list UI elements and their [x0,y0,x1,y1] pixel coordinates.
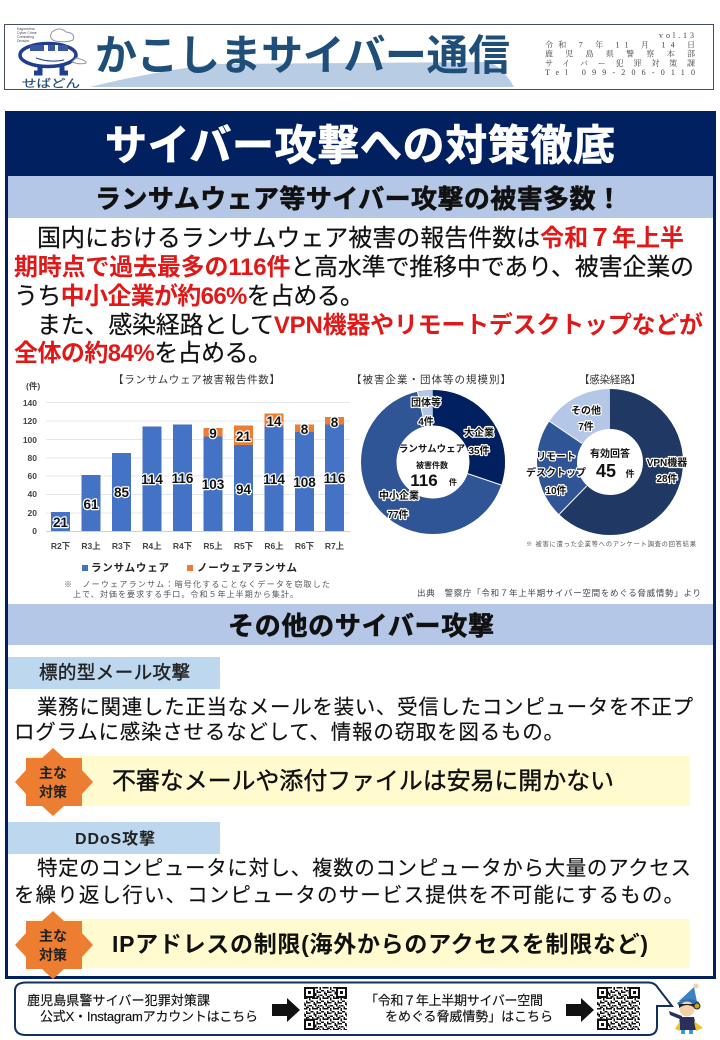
bar chart: ransomware reports [23,373,350,599]
donut labels [379,396,494,521]
donut labels: 35件 [468,444,490,457]
header wave [90,62,514,87]
icon: mascot logo: Cyber Crime [17,31,37,35]
icon: orange star badge: 主な [39,765,67,781]
footer callout [15,982,672,1035]
survey note: ※ 被害に遭った企業等へのアンケート調査の回答結果 [526,539,697,548]
issue details: サイバー犯罪対策課 [545,58,695,68]
icon: orange star badge [15,748,93,816]
x-axis labels: R2下 [51,541,71,551]
subheading: ransomware damage [8,176,713,218]
bar chart: ransomware reports: 60 [28,471,37,481]
donut centre: ランサムウェア [399,444,466,455]
issue details: 鹿児島県警察本部 [545,48,695,58]
chart title: 【感染経路】 [579,373,641,386]
text block: targeted email description: ログラムに感染させるなどして、情報の窃取を図るもの。 [14,721,564,744]
label: DDoS attack: DDoS攻撃 [75,830,155,848]
bar value labels: 61 [83,497,99,512]
bar value labels: 21 [53,515,68,530]
bar value labels: 85 [114,485,129,500]
title band: サイバー攻撃への対策徹底 [105,122,615,169]
x-axis labels [51,541,345,551]
arrow [272,998,300,1022]
bars: ransomware [51,424,344,531]
subheading: ransomware damage: ランサムウェア等サイバー攻撃の被害多数！ [95,184,622,214]
icon: orange star badge: 主な [39,928,67,944]
x-axis labels: R3下 [112,541,132,551]
chart title: 【被害企業・団体等の規模別】 [351,373,511,386]
bar value labels: 114 [141,472,163,487]
donut centre: 件 [625,468,635,479]
label: targeted email attack [8,657,220,689]
intro text block: 期時点で過去最多の116件と高水準で推移中であり、被害企業の [14,254,694,281]
icon: orange star badge [15,911,93,979]
text block: DDoS description: 特定のコンピュータに対し、複数のコンピュータから大量のアクセス [37,857,691,880]
donut labels: 7件 [578,420,594,433]
donut centre: 45 [596,461,616,481]
bar value labels: 116 [324,471,346,486]
bar chart: ransomware reports: 0 [32,526,37,536]
subheading: other attacks [8,604,713,645]
QR code: social accounts [304,987,347,1030]
QR code: threat report [597,987,640,1030]
x-axis labels: R5下 [234,541,254,551]
donut labels: 団体等 [411,396,441,409]
issue details: vol.13 [659,31,694,40]
donut labels [526,404,687,497]
chart title: 【ランサムウェア被害報告件数】 [113,373,280,386]
bar value labels: 14 [266,414,282,429]
countermeasure: email [15,748,690,816]
bar value labels [53,414,346,530]
bar value labels: 21 [236,429,251,444]
icon: mascot logo: Division [17,39,29,43]
footer text: social accounts: 鹿児島県警サイバー犯罪対策課 [27,993,210,1008]
donut labels: 28件 [656,472,678,485]
text block: targeted email description [14,696,694,744]
donut labels: 大企業 [464,426,494,439]
x-axis labels: R3上 [81,541,101,551]
icon: mascot logo [17,27,86,90]
donut centre: 116 [410,471,438,490]
x-axis labels: R7上 [325,541,345,551]
bar chart: ransomware reports: 100 [23,435,37,445]
icon: orange star badge: 対策 [39,784,67,800]
text block: targeted email description: 業務に関連した正当なメールを装い、受信したコンピュータを不正プ [37,696,694,719]
bar value labels: 8 [301,422,309,437]
label: targeted email attack: 標的型メール攻撃 [39,662,190,683]
icon: mascot logo: Kagoshima [17,27,35,31]
bar value labels: 114 [263,472,285,487]
source note: 出典 警察庁「令和７年上半期サイバー空間をめぐる脅威情勢」より [417,588,701,598]
bar value labels: 8 [331,415,339,430]
intro text block: また、感染経路としてVPN機器やリモートデスクトップなどが [37,311,703,339]
intro text block: 国内におけるランサムウェア被害の報告件数は令和７年上半 [37,225,684,252]
donut labels: 77件 [387,508,409,521]
footer callout: 公式X・Instagramアカウントはこちら [40,1009,258,1024]
bar value labels: 108 [293,475,316,490]
text block: DDoS description [14,857,691,907]
countermeasure: email: 不審なメールや添付ファイルは安易に開かない [112,768,614,795]
x-axis labels: R6上 [264,541,284,551]
chart footnote: ※ ノーウェアランサム：暗号化することなくデータを窃取した [64,579,330,589]
bar value labels: 103 [202,477,225,492]
bar chart: ransomware reports: (件) [26,381,40,391]
donut labels: その他 [571,404,601,417]
donut labels: 中小企業 [379,489,419,502]
bar chart: ransomware reports: 上で、対価を要求する手口。令和５年上半期から集計。 [73,589,298,599]
newsletter title: かこしまサイバー通信 [95,32,510,79]
donut labels: 10件 [545,484,567,497]
donut centre: 件 [449,477,457,487]
legend: ランサムウェア [91,562,170,574]
donut labels: VPN機器 [647,456,687,469]
donut chart: company size [351,373,511,521]
x-axis labels: R6下 [295,541,315,551]
icon: mascot logo: Combating [17,35,34,39]
intro text block: うち中小企業が約66%を占める。 [14,282,364,310]
x-axis labels: R4下 [173,541,193,551]
bar chart: ransomware reports: 20 [28,508,37,518]
bar chart: ransomware reports: 140 [23,398,37,408]
bar chart: ransomware reports: 80 [28,453,37,463]
issue details: 令和 7 年 11 月 14 日 [545,40,695,50]
arrow [566,998,594,1022]
header banner [4,24,714,90]
issue details: Tel 099-206-0110 [545,68,695,77]
icon: orange star badge: 対策 [39,947,67,963]
legend [82,562,297,574]
countermeasure: DDoS [15,911,690,979]
icon: mascot logo: せばどん [22,77,80,90]
donut chart: infection route [526,373,697,548]
footer text: threat report: 「令和７年上半期サイバー空間 [365,993,543,1008]
issue details [545,31,695,77]
footer callout: をめぐる脅威情勢」はこちら [385,1009,553,1024]
donut centre: 有効回答 [590,447,630,460]
label: DDoS attack [8,822,220,854]
bar chart: ransomware reports: 40 [28,489,37,499]
bar value labels: 116 [172,471,194,486]
bar value labels: 9 [209,426,217,441]
donut centre: 被害件数 [416,460,448,470]
donut labels: デスクトップ [526,466,586,479]
intro text block: 全体の約84%を占める。 [14,340,272,367]
title band [5,111,716,176]
x-axis labels: R5上 [203,541,223,551]
subheading: other attacks: その他のサイバー攻撃 [228,611,494,641]
countermeasure: DDoS: IPアドレスの制限(海外からのアクセスを制限など) [112,931,648,957]
donut centre [399,444,466,490]
legend: ノーウェアランサム [197,562,297,574]
bars: non-ware ransom [204,414,344,445]
x-axis labels: R4上 [142,541,162,551]
donut labels: リモート [536,451,576,463]
bar value labels: 94 [236,482,251,497]
donut labels: 4件 [418,415,434,428]
icon: police mascot [669,984,703,1034]
intro text block [14,225,703,367]
donut centre [590,447,635,481]
bar chart: ransomware reports: 120 [23,416,37,426]
text block: DDoS description: を繰り返し行い、コンピュータのサービス提供を不可能にするもの。 [14,884,684,907]
